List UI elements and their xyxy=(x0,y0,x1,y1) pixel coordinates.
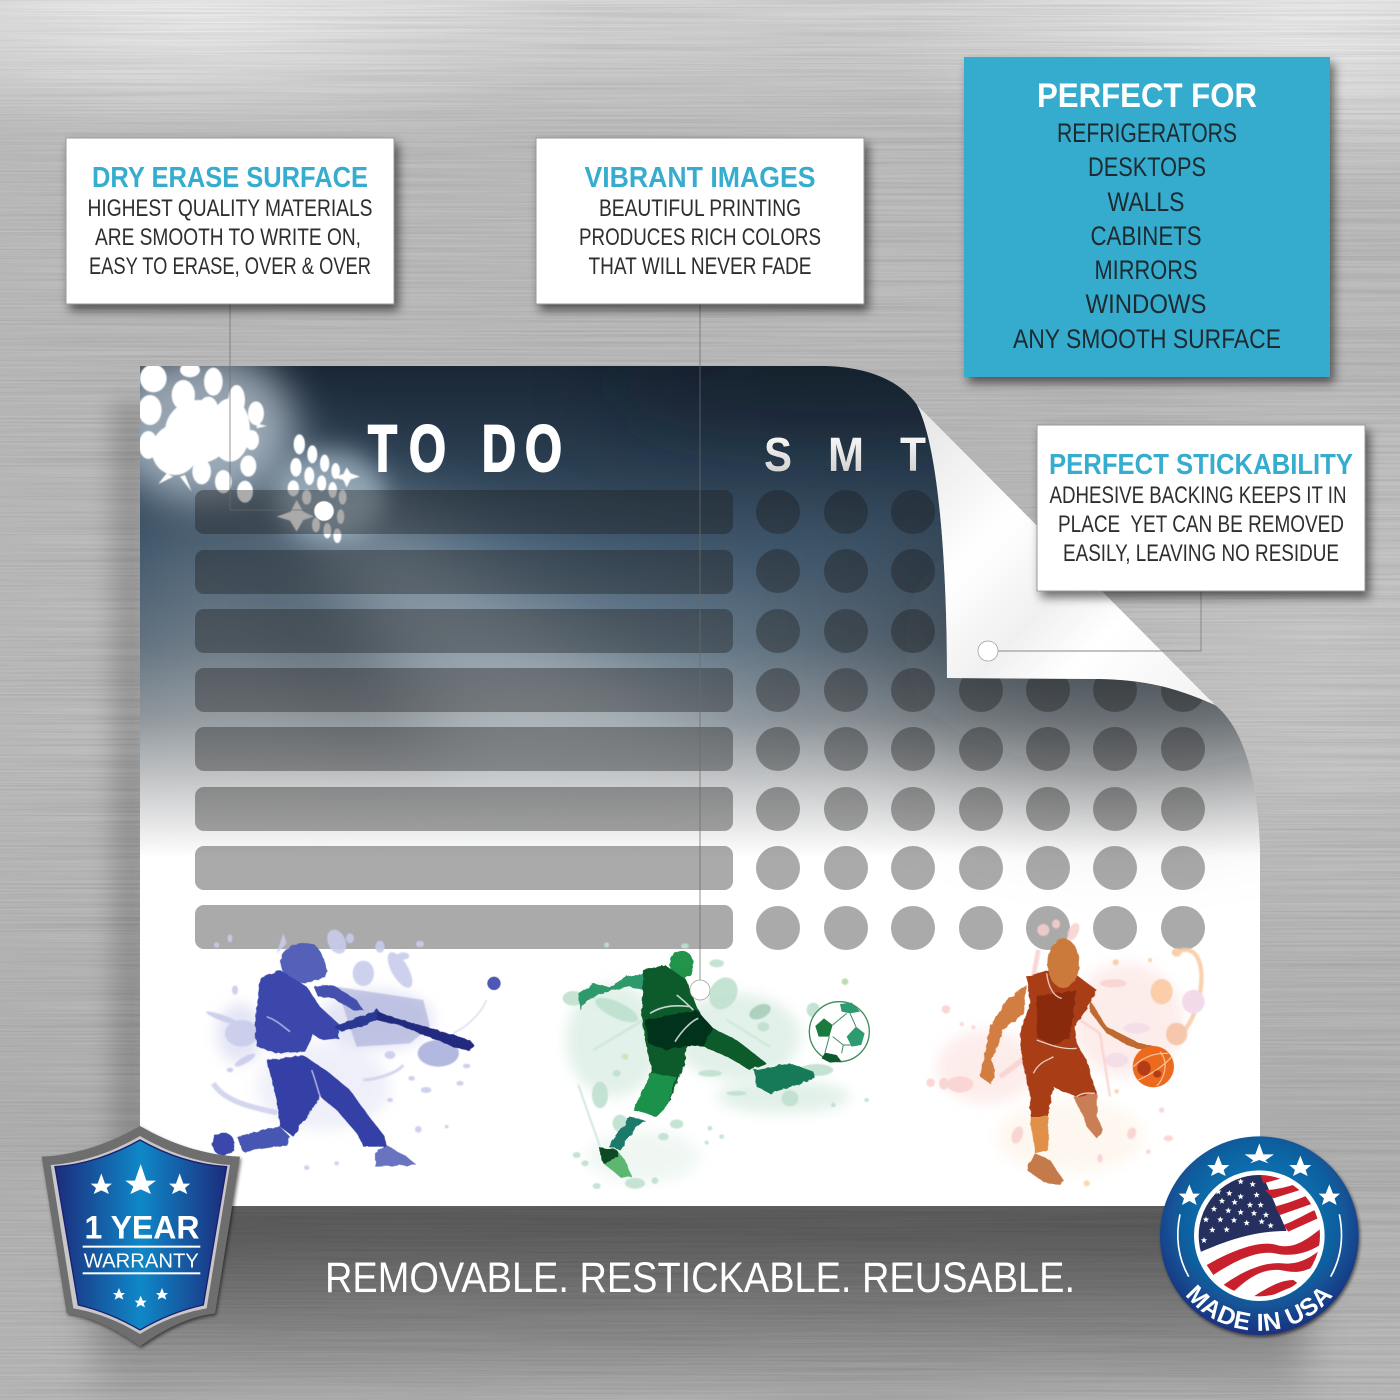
callout: perfect for: MIRRORS xyxy=(1094,255,1198,285)
right side shading xyxy=(890,510,1370,770)
callout: perfect for: PERFECT FOR xyxy=(1037,77,1257,115)
basketball xyxy=(1133,1046,1174,1087)
soccer highlights xyxy=(650,995,698,1042)
callout: dry erase surface: HIGHEST QUALITY MATERIALS xyxy=(88,195,372,222)
callout: perfect for xyxy=(964,57,1330,377)
connector: vibrant images callout xyxy=(690,304,710,1000)
connector: stickability callout xyxy=(978,591,1201,661)
callout: vibrant images: VIBRANT IMAGES xyxy=(584,162,816,194)
weekday letters xyxy=(764,429,926,482)
callout: dry erase surface: ARE SMOOTH TO WRITE ON, xyxy=(95,224,361,251)
weekday letters: T xyxy=(900,429,926,482)
card drop shadow xyxy=(95,400,1305,1400)
baseball xyxy=(487,977,501,990)
callout: dry erase surface: DRY ERASE SURFACE xyxy=(92,162,368,194)
american flag xyxy=(1198,1175,1320,1296)
day check circles xyxy=(756,490,1205,950)
badge: 1 year warranty: 1 YEAR xyxy=(84,1209,199,1245)
side arcs xyxy=(1178,1214,1342,1277)
callout: perfect for: WALLS xyxy=(1108,187,1184,217)
flag stars xyxy=(1201,1178,1274,1243)
heading: to do: TO DO xyxy=(368,412,562,486)
basketball highlights xyxy=(1033,973,1095,1097)
callout: perfect stickability: PERFECT STICKABILITY xyxy=(1049,449,1353,481)
batter soft wash xyxy=(217,990,433,1130)
callout: vibrant images: BEAUTIFUL PRINTING xyxy=(599,195,801,222)
illustration: basketball player xyxy=(926,919,1205,1186)
warranty stars xyxy=(91,1164,190,1307)
dry erase chart sheet xyxy=(140,366,1260,1206)
usa stars xyxy=(1179,1143,1340,1205)
soccer ball xyxy=(809,1002,869,1063)
task rows xyxy=(195,490,733,949)
connector: dry erase callout xyxy=(230,304,334,521)
peeled sheet corner xyxy=(917,405,1215,705)
badge: 1 year warranty: WARRANTY xyxy=(84,1250,199,1272)
basketball soft wash xyxy=(937,963,1183,1173)
callout: perfect for: DESKTOPS xyxy=(1088,152,1206,182)
tagline: REMOVABLE. RESTICKABLE. REUSABLE. xyxy=(325,1254,1075,1302)
top dark shading xyxy=(664,366,928,442)
basketball figure xyxy=(980,939,1160,1185)
basketball splatter xyxy=(926,919,1205,1186)
badge: made in usa xyxy=(1160,1136,1362,1339)
callout: perfect for: CABINETS xyxy=(1090,221,1202,251)
stadium floodlights xyxy=(138,363,360,543)
soccer splatter xyxy=(563,942,869,1189)
callout: perfect for: ANY SMOOTH SURFACE xyxy=(1013,324,1281,354)
callout: perfect stickability xyxy=(1037,425,1365,591)
badge: made in usa: MADE IN USA xyxy=(1186,1284,1333,1331)
callout: vibrant images: PRODUCES RICH COLORS xyxy=(579,224,821,251)
callout: perfect for: WINDOWS xyxy=(1086,289,1206,319)
callout: perfect for: REFRIGERATORS xyxy=(1057,118,1237,148)
batter highlights xyxy=(267,1017,322,1100)
badge: 1 year warranty xyxy=(42,1126,240,1346)
illustration: baseball batter xyxy=(205,927,501,1170)
batter figure xyxy=(212,943,474,1167)
illustration: soccer player xyxy=(563,942,869,1189)
callout: vibrant images: THAT WILL NEVER FADE xyxy=(588,253,812,280)
callout: vibrant images xyxy=(536,138,864,304)
weekday letters: M xyxy=(828,429,864,482)
soccer soft wash xyxy=(567,983,850,1183)
callout: dry erase surface: EASY TO ERASE, OVER & OVER xyxy=(89,253,371,280)
light beams xyxy=(140,366,750,776)
weekday letters: S xyxy=(764,429,792,482)
callout: dry erase surface xyxy=(66,138,394,304)
batter splatter xyxy=(205,927,487,1170)
soccer figure xyxy=(578,950,815,1178)
